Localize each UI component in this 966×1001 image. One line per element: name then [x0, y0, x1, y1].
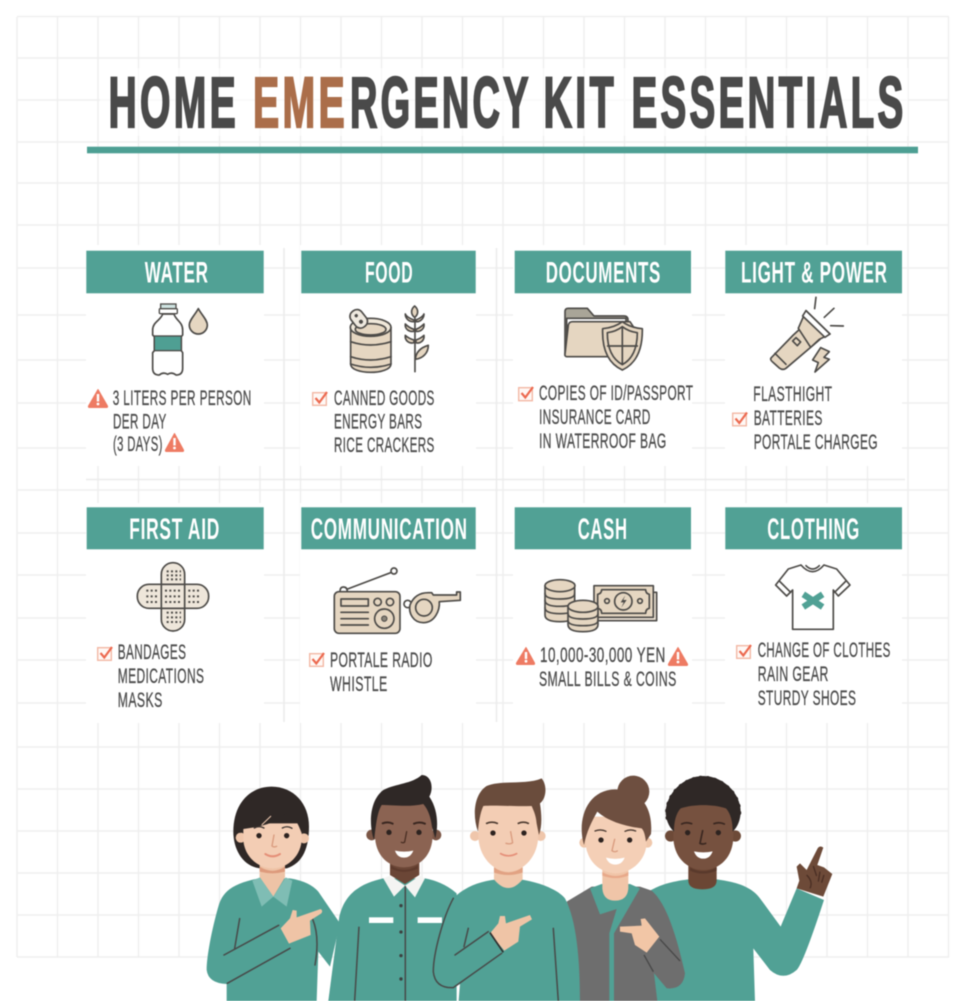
- icon: water bottle and drop: [153, 304, 207, 375]
- person: center man pointing: [433, 778, 580, 1001]
- list: documents: IN WATERROOF BAG: [539, 430, 667, 453]
- heading: clothing: [725, 507, 902, 549]
- heading: communication: [301, 507, 476, 549]
- heading: water: WATER: [145, 256, 209, 289]
- list: water: (3 DAYS): [113, 433, 163, 456]
- list: documents: INSURANCE CARD: [539, 406, 651, 429]
- person: right man pointing up: [647, 776, 832, 1001]
- panel: clothing: [725, 503, 902, 723]
- list: light and power: BATTERIES: [754, 407, 823, 430]
- list: light and power: [733, 383, 878, 454]
- list: clothing: [737, 639, 891, 710]
- list: communication: PORTALE RADIO: [330, 649, 433, 672]
- title: KIT: [544, 64, 617, 143]
- heading: cash: [515, 507, 691, 549]
- person: man in teal button-up shirt: [328, 775, 457, 1001]
- list: clothing: RAIN GEAR: [758, 663, 829, 686]
- list: food: RICE CRACKERS: [334, 434, 435, 457]
- list: water: 3 LITERS PER PERSON: [113, 387, 252, 410]
- heading: communication: COMMUNICATION: [311, 513, 468, 546]
- list: cash: SMALL BILLS & COINS: [539, 668, 677, 691]
- icon: coins and bills: [545, 580, 657, 632]
- list: food: ENERGY BARS: [334, 410, 422, 433]
- people illustration: [207, 775, 832, 1001]
- list: communication: [310, 649, 433, 696]
- heading: food: [301, 251, 476, 293]
- list: food: CANNED GOODS: [334, 387, 435, 410]
- list: first aid: BANDAGES: [118, 641, 186, 664]
- heading: light and power: [725, 251, 902, 293]
- list: documents: COPIES OF ID/PASSPORT: [539, 382, 693, 405]
- icon: radio and whistle: [334, 568, 460, 633]
- list: cash: [516, 644, 688, 691]
- heading: water: [86, 251, 264, 293]
- list: clothing: STURDY SHOES: [758, 687, 856, 710]
- list: first aid: [98, 641, 204, 712]
- title underline: [87, 147, 918, 153]
- heading: clothing: CLOTHING: [767, 513, 860, 546]
- list: light and power: FLASTHIGHT: [753, 383, 832, 406]
- panel: communication: [300, 503, 476, 723]
- list: cash: 10,000-30,000 YEN: [540, 644, 666, 667]
- title: HOME: [108, 64, 239, 143]
- title: EME: [253, 64, 348, 143]
- list: food: [313, 387, 435, 457]
- person: left woman in teal sweater: [207, 787, 340, 1001]
- icon: canned goods and wheat: [348, 306, 428, 372]
- heading: documents: DOCUMENTS: [546, 256, 661, 289]
- panel: documents: [513, 245, 693, 466]
- icon: t-shirt: [776, 565, 850, 629]
- panel: light and power: [725, 245, 902, 466]
- list: first aid: MEDICATIONS: [118, 665, 204, 688]
- panel: first aid: [86, 503, 264, 723]
- list: documents: [519, 382, 693, 453]
- heading: cash: CASH: [578, 513, 628, 546]
- title: RGENCY: [350, 64, 531, 143]
- panel: food: [300, 245, 476, 466]
- icon: folder and shield: [565, 308, 642, 370]
- panel: cash: [513, 503, 692, 723]
- panel: water: [86, 245, 264, 466]
- list: communication: WHISTLE: [330, 673, 388, 696]
- icon: flashlight: [771, 297, 843, 372]
- person: woman with hair bun in gray jacket: [567, 776, 685, 1001]
- heading: first aid: FIRST AID: [129, 513, 220, 546]
- heading: documents: [515, 251, 691, 293]
- heading: food: FOOD: [365, 256, 413, 289]
- heading: first aid: [87, 507, 264, 549]
- list: water: [88, 387, 252, 456]
- list: water: DER DAY: [113, 410, 167, 433]
- list: first aid: MASKS: [118, 689, 163, 712]
- list: light and power: PORTALE CHARGEG: [754, 431, 878, 454]
- icon: bandages: [137, 563, 209, 631]
